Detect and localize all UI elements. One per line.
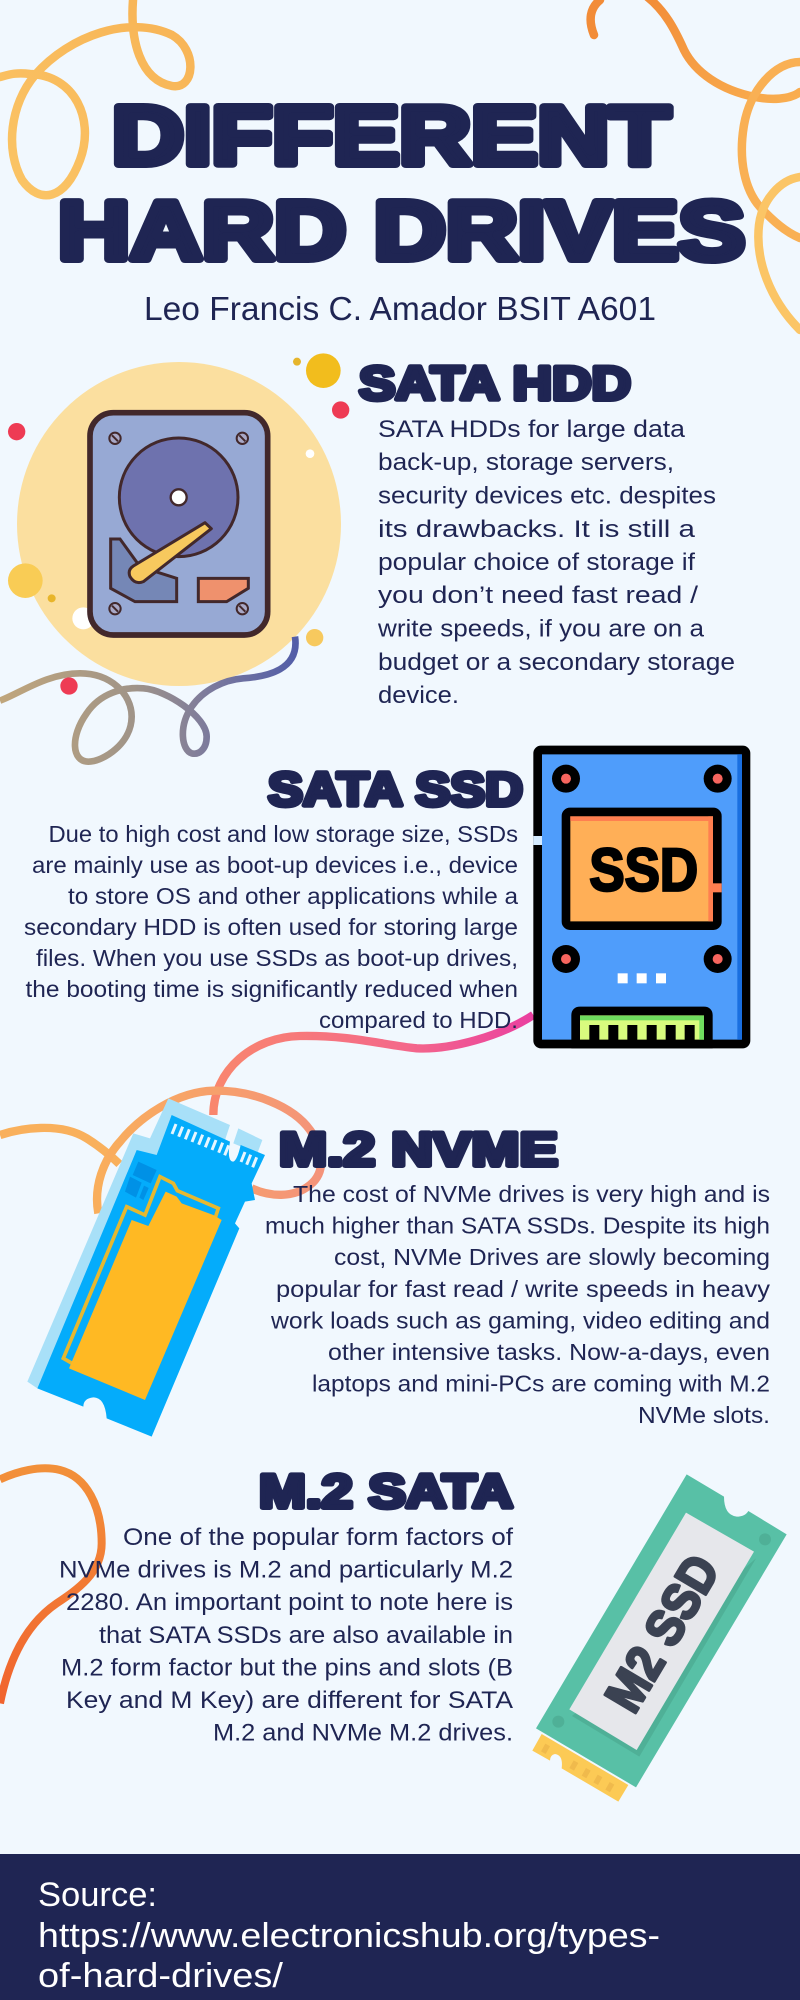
text: M.2 SATA description: 2280. An important point to note here is bbox=[66, 1589, 513, 1616]
text: SATA HDD description: its drawbacks. It is still a bbox=[378, 516, 696, 543]
text: M.2 NVME description: other intensive tasks. Now-a-days, even bbox=[328, 1339, 770, 1365]
text: SATA SSD description: to store OS and other applications while a bbox=[68, 883, 518, 909]
icon: hard disk drive with decoration bbox=[0, 353, 349, 762]
text: M.2 NVME description: The cost of NVMe drives is very high and is bbox=[293, 1181, 770, 1207]
text: source link: Source: bbox=[38, 1876, 157, 1914]
text: M.2 SATA description: that SATA SSDs are also available in bbox=[99, 1622, 513, 1649]
text: SATA SSD description: secondary HDD is often used for storing large bbox=[24, 914, 518, 940]
title bbox=[58, 89, 745, 277]
text: M.2 SATA description: NVMe drives is M.2 and particularly M.2 bbox=[59, 1557, 513, 1584]
icon: SSD board: SSD bbox=[589, 836, 698, 904]
icon: M.2 NVMe drive bbox=[27, 1098, 265, 1437]
text: SATA SSD description: compared to HDD. bbox=[319, 1007, 518, 1033]
text: SATA SSD description: the booting time is significantly reduced when bbox=[26, 976, 518, 1002]
text: M.2 SATA description: Key and M Key) are different for SATA bbox=[66, 1687, 513, 1714]
text: M.2 NVME description: cost, NVMe Drives are slowly becoming bbox=[334, 1244, 770, 1270]
text: M.2 NVME description: work loads such as gaming, video editing and bbox=[270, 1307, 770, 1333]
icon: M.2 SATA drive: M2 SSD bbox=[593, 1545, 730, 1721]
panel: M.2 SATA bbox=[0, 1466, 787, 1802]
heading: SATA HDD: SATA HDD bbox=[359, 358, 631, 410]
squiggle: top left bbox=[0, 0, 190, 195]
panel: M.2 NVME bbox=[0, 1091, 771, 1437]
text: SATA SSD description: Due to high cost and low storage size, SSDs bbox=[48, 821, 518, 847]
subtitle: Leo Francis C. Amador BSIT A601 bbox=[144, 290, 656, 327]
text: SATA HDD description: you don’t need fast read / bbox=[378, 582, 698, 609]
icon: M.2 SATA drive bbox=[532, 1474, 787, 1802]
text: M.2 NVME description: NVMe slots. bbox=[638, 1402, 770, 1428]
heading: SATA SSD: SATA SSD bbox=[268, 764, 523, 816]
text: SATA SSD description bbox=[24, 821, 518, 1033]
text: M.2 SATA description: M.2 and NVMe M.2 drives. bbox=[213, 1720, 513, 1747]
text: source link: https://www.electronicshub.org/types- bbox=[38, 1917, 660, 1955]
heading: M.2 NVME: M.2 NVME bbox=[279, 1124, 558, 1176]
text: SATA HDD description: popular choice of storage if bbox=[378, 549, 695, 576]
squiggle: pink connector bbox=[213, 1015, 533, 1115]
title: HARD DRIVES bbox=[58, 184, 745, 277]
panel: SATA SSD bbox=[24, 750, 746, 1044]
text: M.2 NVME description: popular for fast read / write speeds in heavy bbox=[276, 1276, 771, 1302]
squiggle: orange curve bbox=[0, 1468, 102, 1703]
text: SATA HDD description: write speeds, if you are on a bbox=[377, 616, 705, 642]
text: source link: of-hard-drives/ bbox=[38, 1957, 284, 1995]
text: SATA SSD description: files. When you use SSDs as boot-up drives, bbox=[36, 945, 518, 971]
text: SATA HDD description bbox=[377, 416, 735, 709]
text: M.2 SATA description bbox=[59, 1524, 513, 1747]
text: SATA HDD description: security devices etc. despites bbox=[378, 482, 716, 510]
text: SATA HDD description: budget or a secondary storage bbox=[378, 649, 735, 676]
squiggle: orange loop bbox=[0, 1091, 321, 1213]
text: SATA SSD description: are mainly use as boot-up devices i.e., device bbox=[32, 852, 518, 878]
text: M.2 NVME description bbox=[265, 1181, 771, 1428]
squiggles: top right bbox=[591, 0, 800, 330]
text: M.2 SATA description: One of the popular form factors of bbox=[123, 1524, 513, 1551]
heading: M.2 SATA: M.2 SATA bbox=[259, 1466, 513, 1518]
panel: SATA HDD bbox=[0, 353, 735, 762]
footer: source bbox=[0, 1854, 800, 2000]
text: source link bbox=[38, 1876, 660, 1995]
title: DIFFERENT bbox=[112, 89, 670, 182]
text: M.2 NVME description: much higher than SATA SSDs. Despite its high bbox=[265, 1213, 770, 1239]
icon: SSD board bbox=[533, 750, 746, 1044]
text: M.2 NVME description: laptops and mini-PCs are coming with M.2 bbox=[312, 1371, 770, 1397]
text: SATA HDD description: back-up, storage servers, bbox=[378, 449, 674, 476]
text: SATA HDD description: SATA HDDs for large data bbox=[378, 416, 686, 443]
text: SATA HDD description: device. bbox=[378, 682, 459, 709]
text: M.2 SATA description: M.2 form factor but the pins and slots (B bbox=[61, 1654, 513, 1681]
